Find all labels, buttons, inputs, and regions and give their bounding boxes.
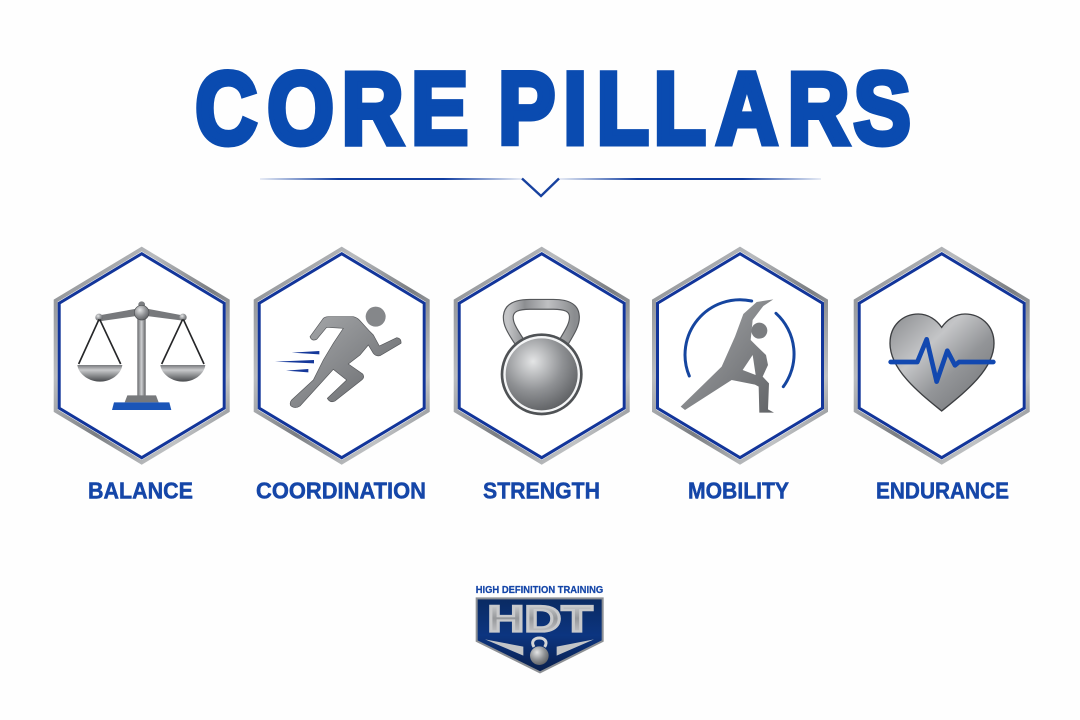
title divider with pointer — [260, 178, 821, 196]
title: CORE PILLARS — [195, 52, 911, 165]
hexagon frame — [856, 249, 1028, 462]
icon: kettlebell — [501, 304, 583, 415]
logo lettering: HDT — [487, 597, 593, 639]
arcs of motion — [685, 300, 794, 387]
panel: endurance — [856, 249, 1028, 504]
label: endurance: ENDURANCE — [876, 478, 1009, 504]
label: mobility: MOBILITY — [688, 478, 789, 504]
panel: coordination — [256, 249, 428, 504]
label: coordination: COORDINATION — [256, 478, 426, 504]
logo — [476, 585, 603, 672]
hexagon frame — [56, 249, 228, 462]
icon: stretching figure — [681, 299, 794, 413]
panel: strength — [456, 249, 628, 504]
icon: runner — [275, 307, 401, 408]
panel: balance — [56, 249, 228, 504]
logo tagline: HIGH DEFINITION TRAINING — [476, 585, 603, 596]
hexagon frame — [256, 249, 428, 462]
panel: mobility — [654, 249, 826, 504]
figure — [681, 299, 774, 413]
icon: scales — [77, 301, 205, 410]
hexagon frame — [654, 249, 826, 462]
label: balance: BALANCE — [88, 478, 193, 504]
label: strength: STRENGTH — [483, 478, 600, 504]
icon: heart with pulse — [890, 314, 994, 411]
hexagon frame — [456, 249, 628, 462]
